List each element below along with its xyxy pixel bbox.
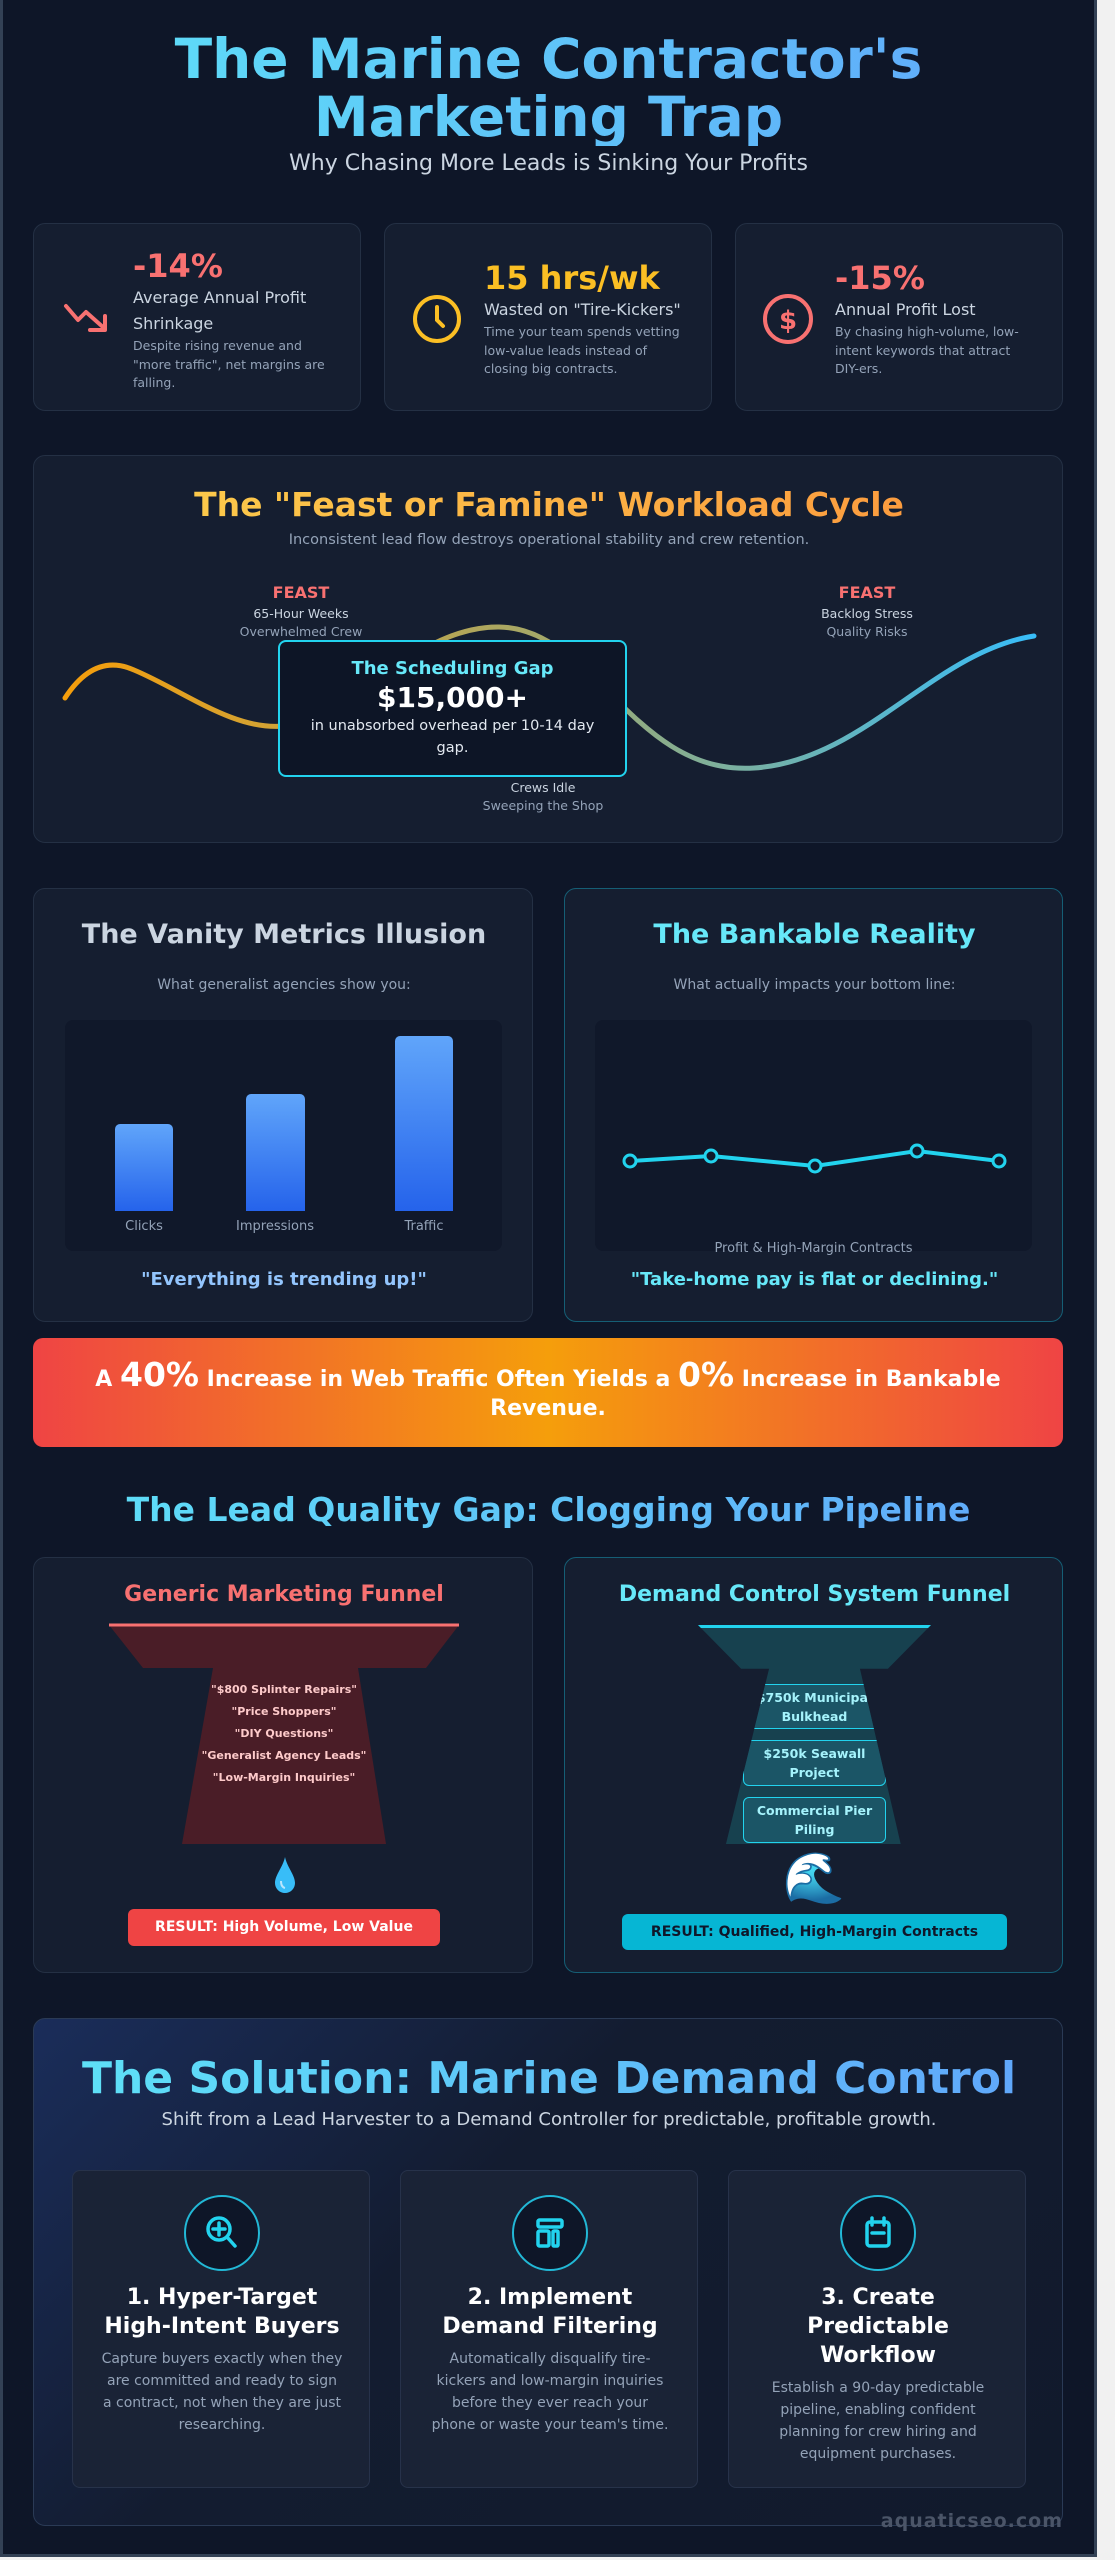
step 1: Capture buyers exactly when they <box>102 2351 342 2367</box>
stat text: falling. <box>133 375 175 390</box>
quote: "Take-home pay is flat or declining." <box>631 1269 998 1290</box>
bar: impressions <box>246 1094 305 1211</box>
step 3: Establish a 90-day predictable <box>772 2380 984 2396</box>
step 2: Automatically disqualify tire- <box>450 2351 650 2367</box>
funnel box: pier: Piling <box>795 1822 834 1837</box>
panel: bankable reality <box>564 888 1063 1322</box>
callout: scheduling gap: in unabsorbed overhead per 10-14 day gap. <box>311 718 594 756</box>
step 2: kickers and low-margin inquiries <box>437 2373 663 2389</box>
step 3 <box>728 2170 1026 2488</box>
subtitle: Why Chasing More Leads is Sinking Your Profits <box>289 151 808 176</box>
bar chart: Traffic <box>404 1219 444 1234</box>
callout: scheduling gap <box>278 640 627 777</box>
icon: water drop <box>275 1857 295 1893</box>
funnel box: seawall <box>743 1740 886 1786</box>
heading: The Solution: Marine Demand Control <box>82 2053 1016 2104</box>
step 1 <box>72 2170 370 2488</box>
title <box>0 30 1097 146</box>
result button: RESULT: High Volume, Low Value <box>155 1919 413 1935</box>
stat text: intent keywords that attract <box>835 342 1010 358</box>
label: famine: Sweeping the Shop <box>483 798 603 813</box>
result button <box>128 1909 440 1946</box>
line chart <box>595 1020 1032 1251</box>
stat text: Time your team spends vetting <box>484 324 680 339</box>
step 1: researching. <box>179 2417 265 2433</box>
stat text: 15 hrs/wk <box>484 259 660 297</box>
step 1: 1. Hyper-Target <box>127 2285 317 2310</box>
step 3: pipeline, enabling confident <box>780 2402 976 2418</box>
bar chart: Clicks <box>125 1219 163 1234</box>
panel: vanity metrics <box>33 888 533 1322</box>
bar chart: Impressions <box>236 1219 314 1234</box>
label: famine <box>483 780 603 813</box>
label: feast right: Backlog Stress <box>821 606 913 621</box>
subheading: What generalist agencies show you: <box>157 977 411 993</box>
funnel box: bulkhead <box>754 1684 874 1729</box>
icon: filter <box>512 2195 588 2271</box>
heading: The Bankable Reality <box>653 919 976 950</box>
stat text: Average Annual Profit <box>133 288 306 307</box>
subheading: What actually impacts your bottom line: <box>674 977 955 993</box>
stat text: By chasing high-volume, low- <box>835 324 1019 339</box>
funnel box: seawall: Project <box>789 1765 840 1780</box>
label: feast right: Quality Risks <box>826 624 908 639</box>
step 2 <box>400 2170 698 2488</box>
title: Marketing Trap <box>314 85 783 149</box>
panel: generic funnel <box>33 1557 533 1973</box>
label: feast left: Overwhelmed Crew <box>240 624 362 639</box>
stat card 3 <box>735 223 1063 411</box>
panel: feast or famine <box>33 455 1063 843</box>
subheading: Inconsistent lead flow destroys operational stability and crew retention. <box>289 532 809 548</box>
icon: dollar <box>763 294 813 344</box>
quote: "Everything is trending up!" <box>141 1269 427 1290</box>
icon: dollar: $ <box>779 306 797 336</box>
stat text <box>133 247 325 390</box>
icon: trending down <box>64 304 107 332</box>
step 1: are committed and ready to sign <box>107 2373 337 2389</box>
result button <box>622 1914 1007 1950</box>
heading: Generic Marketing Funnel <box>124 1582 444 1607</box>
heading: The Vanity Metrics Illusion <box>82 919 486 950</box>
stat card 2 <box>384 223 712 411</box>
funnel leads: "$800 Splinter Repairs" <box>211 1683 357 1696</box>
bar chart <box>65 1020 502 1251</box>
funnel <box>109 1624 459 1844</box>
step 3: equipment purchases. <box>800 2446 956 2462</box>
stat text: Despite rising revenue and <box>133 338 302 353</box>
stat card 1 <box>33 223 361 411</box>
stat text: closing big contracts. <box>484 361 618 376</box>
step 3: Predictable <box>807 2314 949 2339</box>
stat text <box>835 259 1019 376</box>
funnel box: pier <box>743 1797 886 1843</box>
callout: scheduling gap: $15,000+ <box>377 681 528 714</box>
label: feast left: FEAST <box>273 583 329 602</box>
step 3: 3. Create <box>821 2285 935 2310</box>
heading: Demand Control System Funnel <box>619 1582 1010 1607</box>
stat text: low-value leads instead of <box>484 342 647 358</box>
title: The Marine Contractor's <box>175 27 922 91</box>
step 1: a contract, not when they are just <box>103 2395 341 2411</box>
bar: clicks <box>115 1124 173 1211</box>
step 2: phone or waste your team's time. <box>432 2417 668 2433</box>
stat text: Shrinkage <box>133 314 213 333</box>
funnel leads: "Price Shoppers" <box>231 1705 337 1718</box>
heading <box>34 485 1064 525</box>
stat text: Annual Profit Lost <box>835 300 976 319</box>
funnel <box>698 1625 931 1844</box>
stat text <box>484 259 681 376</box>
funnel box: bulkhead: Bulkhead <box>782 1709 847 1724</box>
label: feast left <box>240 583 362 639</box>
funnel leads: "Low-Margin Inquiries" <box>213 1771 355 1784</box>
step 3: Workflow <box>820 2343 936 2368</box>
icon: zoom in <box>184 2195 260 2271</box>
label: feast left: 65-Hour Weeks <box>253 606 349 621</box>
section heading: lead quality: The Lead Quality Gap: Clogging Your Pipeline <box>127 1490 970 1529</box>
funnel leads <box>202 1683 366 1784</box>
funnel box: pier: Commercial Pier <box>757 1803 872 1818</box>
footer: brand: aquaticseo.com <box>881 2510 1063 2532</box>
step 3: planning for crew hiring and <box>779 2424 977 2440</box>
bar: traffic <box>395 1036 453 1211</box>
label: famine: Crews Idle <box>511 780 575 795</box>
step 2: Demand Filtering <box>442 2314 658 2339</box>
banner <box>33 1338 1063 1447</box>
callout: scheduling gap: The Scheduling Gap <box>351 658 554 679</box>
stat text: -14% <box>133 247 223 285</box>
wave chart <box>62 624 1036 771</box>
step 2: 2. Implement <box>468 2285 632 2310</box>
label: feast right <box>821 583 913 639</box>
panel: solution <box>33 2018 1063 2526</box>
heading: The "Feast or Famine" Workload Cycle <box>194 485 904 524</box>
funnel leads: "Generalist Agency Leads" <box>202 1749 366 1762</box>
line chart: Profit & High-Margin Contracts <box>714 1241 913 1256</box>
banner: A 40% Increase in Web Traffic Often Yields a 0% Increase in Bankable Revenue. <box>95 1355 1001 1421</box>
stat text: "more traffic", net margins are <box>133 356 325 372</box>
funnel box: bulkhead: $750k Municipal <box>757 1690 872 1705</box>
stat text: Wasted on "Tire-Kickers" <box>484 300 681 319</box>
funnel box: seawall: $250k Seawall <box>764 1746 865 1761</box>
icon: wave: 🌊 <box>783 1849 845 1907</box>
step 2: before they ever reach your <box>452 2395 648 2411</box>
label: feast right: FEAST <box>839 583 895 602</box>
icon: clock <box>413 295 461 343</box>
step 1: High-Intent Buyers <box>104 2314 340 2339</box>
icon: calendar <box>840 2195 916 2271</box>
stat text: -15% <box>835 259 925 297</box>
funnel leads: "DIY Questions" <box>235 1727 333 1740</box>
result button: RESULT: Qualified, High-Margin Contracts <box>651 1924 978 1940</box>
stat text: DIY-ers. <box>835 361 882 376</box>
panel: demand control funnel <box>564 1557 1063 1973</box>
subheading: Shift from a Lead Harvester to a Demand Controller for predictable, profitable growth. <box>162 2109 936 2130</box>
